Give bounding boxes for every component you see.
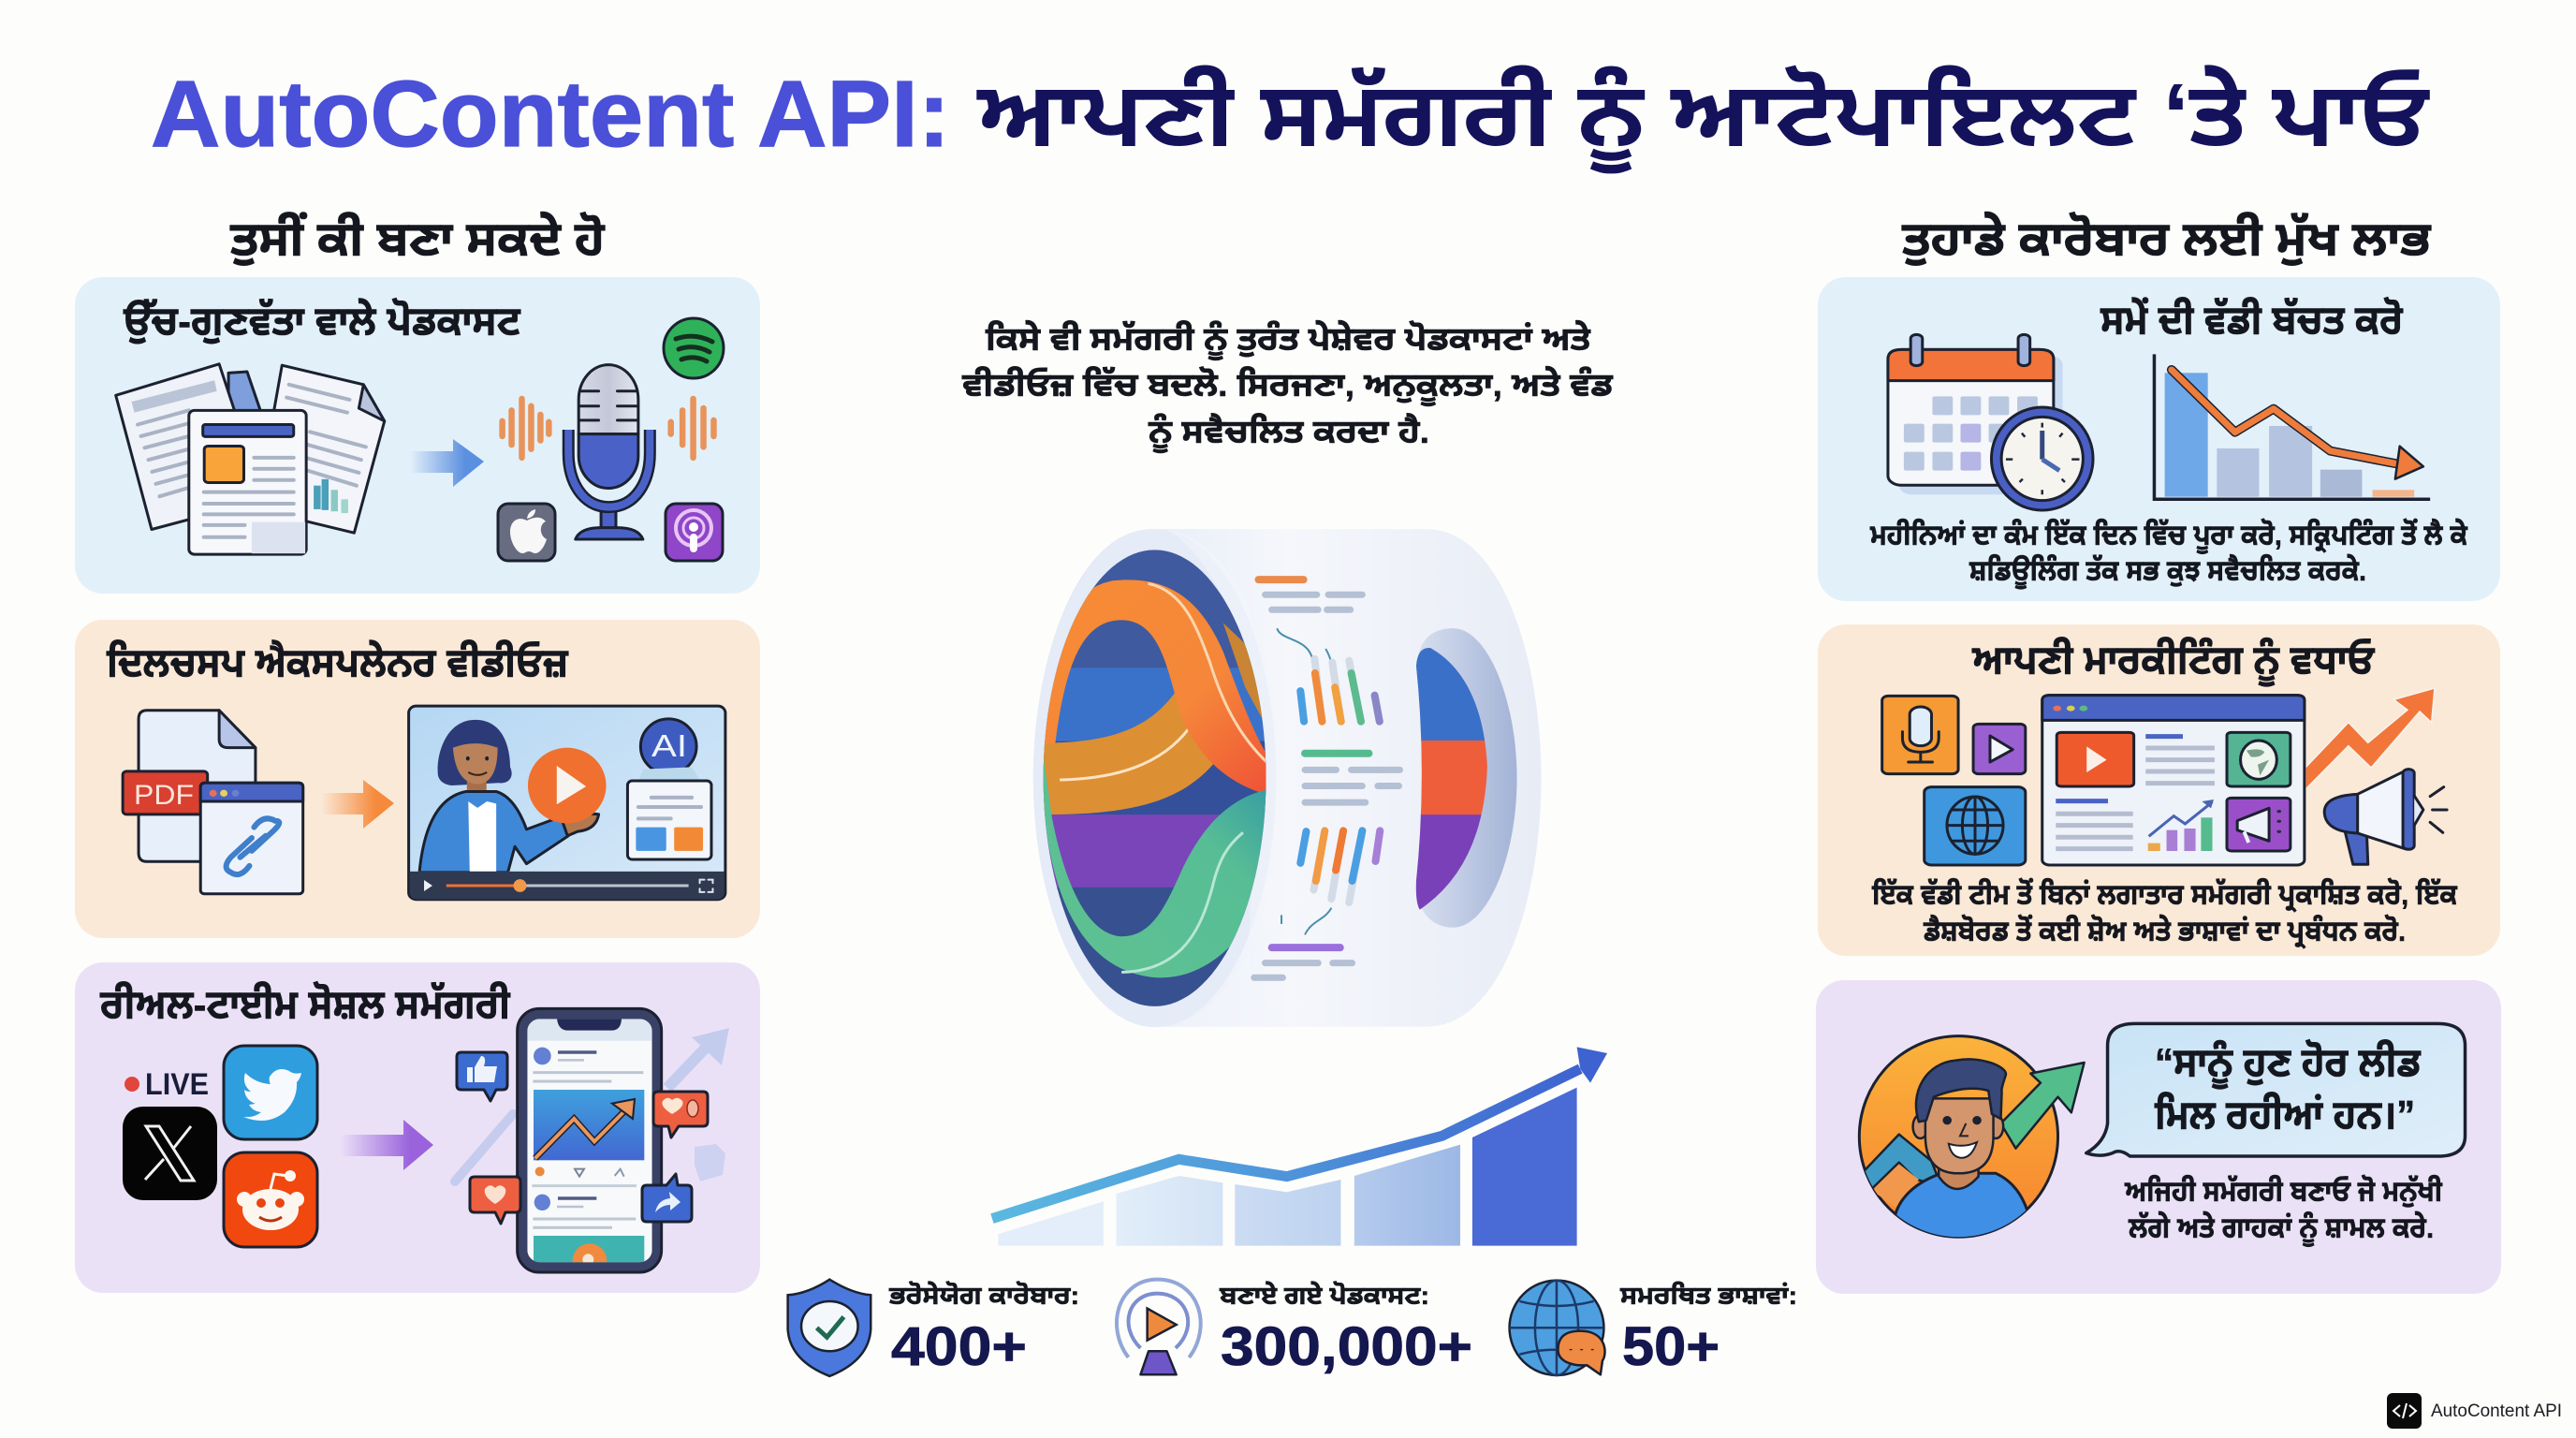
icon: heart bubble left	[470, 1177, 520, 1224]
icon: spotify	[664, 318, 724, 378]
body text: save time	[1869, 519, 2468, 589]
icon: megaphone	[2324, 770, 2447, 864]
body text: testimonial	[2124, 1175, 2443, 1246]
text: AI badge: AI	[651, 728, 687, 763]
panel heading: explainer videos: ਦਿਲਚਸਪ ਐਕਸਪਲੇਨਰ ਵੀਡੀਓਜ਼	[106, 638, 569, 686]
quote text: ਮਿਲ ਰਹੀਆਂ ਹਨ।”	[2154, 1092, 2415, 1138]
intro text: ਵੀਡੀਓਜ਼ ਵਿੱਚ ਬਦਲੋ. ਸਿਰਜਣਾ, ਅਨੁਕੂਲਤਾ, ਅਤੇ ਵੰਡ	[961, 365, 1614, 407]
panel: podcasts	[75, 277, 760, 594]
faded growth arrows	[455, 1028, 729, 1181]
body text: testimonial: ਅਜਿਹੀ ਸਮੱਗਰੀ ਬਣਾਓ ਜੋ ਮਨੁੱਖੀ	[2124, 1175, 2443, 1208]
icon: broadcast	[1117, 1280, 1201, 1374]
icon: calendar and clock	[1888, 334, 2093, 510]
icon: rising arrow	[2305, 688, 2435, 789]
stat: podcasts created	[1117, 1280, 1472, 1377]
icon: podcast tile	[666, 504, 723, 561]
icon: x tile	[123, 1107, 217, 1200]
heading: key benefits: ਤੁਹਾਡੇ ਕਾਰੋਬਾਰ ਲਈ ਮੁੱਖ ਲਾਭ	[1901, 212, 2432, 267]
body text: boost marketing: ਡੈਸ਼ਬੋਰਡ ਤੋਂ ਕਈ ਸ਼ੋਅ ਅਤੇ ਭਾਸ਼ਾਵਾਂ ਦਾ ਪ੍ਰਬੰਧਨ ਕਰੋ.	[1923, 915, 2406, 949]
chart: falling time	[2154, 354, 2430, 499]
arrow: documents to podcast	[410, 439, 484, 487]
title	[151, 62, 2430, 174]
title: AutoContent API:	[151, 62, 950, 167]
stat: supported languages	[1510, 1281, 1797, 1377]
panel: explainer videos	[75, 620, 760, 938]
body text: testimonial: ਲੱਗੇ ਅਤੇ ਗਾਹਕਾਂ ਨੂੰ ਸ਼ਾਮਲ ਕਰੇ.	[2128, 1211, 2434, 1246]
stat: trusted businesses	[788, 1280, 1079, 1377]
watermark: AutoContent API	[2387, 1393, 2562, 1429]
text: PDF label: PDF	[134, 780, 194, 811]
panel: real-time social content	[75, 962, 760, 1293]
icon: microphone	[568, 365, 650, 539]
icon: smiling customer avatar	[1859, 1036, 2085, 1242]
body text: save time: ਮਹੀਨਿਆਂ ਦਾ ਕੰਮ ਇੱਕ ਦਿਨ ਵਿੱਚ ਪੂਰਾ ਕਰੋ, ਸਕ੍ਰਿਪਟਿੰਗ ਤੋਂ ਲੈ ਕੇ	[1869, 519, 2468, 553]
icon: dashboard window	[2042, 696, 2305, 865]
number: 400+: 400+	[891, 1316, 1027, 1377]
body text: boost marketing: ਇੱਕ ਵੱਡੀ ਟੀਮ ਤੋਂ ਬਿਨਾਂ ਲਗਾਤਾਰ ਸਮੱਗਰੀ ਪ੍ਰਕਾਸ਼ਿਤ ਕਰੋ, ਇੱਕ	[1871, 878, 2458, 913]
watermark: AutoContent API: AutoContent API	[2431, 1401, 2562, 1421]
quote text	[2154, 1038, 2422, 1138]
icon: phone feed	[518, 1008, 662, 1278]
intro text: ਕਿਸੇ ਵੀ ਸਮੱਗਰੀ ਨੂੰ ਤੁਰੰਤ ਪੇਸ਼ੇਵਰ ਪੋਡਕਾਸਟਾਂ ਅਤੇ	[985, 319, 1591, 361]
intro text: ਨੂੰ ਸਵੈਚਲਿਤ ਕਰਦਾ ਹੈ.	[1148, 413, 1429, 454]
chart: growth area with arrow	[992, 1047, 1607, 1246]
icon: share bubble	[642, 1174, 692, 1222]
panel: testimonial	[1816, 980, 2501, 1294]
arrow: source to video	[321, 780, 394, 829]
heading: what you can build: ਤੁਸੀਂ ਕੀ ਬਣਾ ਸਕਦੇ ਹੋ	[229, 212, 606, 267]
quote text: “ਸਾਨੂੰ ਹੁਣ ਹੋਰ ਲੀਡ	[2155, 1038, 2422, 1090]
number: 50+: 50+	[1622, 1316, 1720, 1377]
body text: boost marketing	[1871, 878, 2458, 949]
body text: save time: ਸ਼ਡਿਊਲਿੰਗ ਤੱਕ ਸਭ ਕੁਝ ਸਵੈਚਲਿਤ ਕਰਕੇ.	[1969, 554, 2366, 589]
label: podcasts created: ਬਣਾਏ ਗਏ ਪੋਡਕਾਸਟ:	[1219, 1281, 1429, 1310]
live badge: LIVE	[145, 1067, 209, 1101]
arrow: social to phone	[340, 1120, 433, 1170]
icon: apple podcasts tile	[498, 504, 555, 561]
panel: boost marketing	[1818, 624, 2500, 956]
icon: globe with chat	[1510, 1281, 1605, 1375]
icon: like bubble	[457, 1052, 507, 1101]
icon: pdf and link	[123, 711, 303, 894]
label: trusted businesses: ਭਰੋਸੇਯੋਗ ਕਾਰੋਬਾਰ:	[888, 1281, 1079, 1310]
icon: video player	[409, 706, 725, 900]
intro text	[961, 319, 1614, 454]
icon: reddit tile	[224, 1152, 317, 1247]
panel heading: podcasts: ਉੱਚ-ਗੁਣਵੱਤਾ ਵਾਲੇ ਪੋਡਕਾਸਟ	[123, 297, 521, 345]
panel: save time	[1818, 277, 2500, 601]
panel heading: save time: ਸਮੇਂ ਦੀ ਵੱਡੀ ਬੱਚਤ ਕਰੋ	[2100, 296, 2404, 344]
icon: twitter tile	[224, 1046, 317, 1139]
panel heading: social content: ਰੀਅਲ-ਟਾਈਮ ਸੋਸ਼ਲ ਸਮੱਗਰੀ	[99, 980, 511, 1028]
icon: media tiles	[1882, 696, 2026, 865]
title: ਆਪਣੀ ਸਮੱਗਰੀ ਨੂੰ ਆਟੋਪਾਇਲਟ ‘ਤੇ ਪਾਓ	[976, 65, 2430, 174]
speech bubble	[2086, 1023, 2466, 1156]
icon: shield	[788, 1280, 871, 1376]
icon: sound waves	[503, 399, 713, 458]
icon: documents	[116, 364, 385, 554]
panel heading: boost marketing: ਆਪਣੀ ਮਾਰਕੀਟਿੰਗ ਨੂੰ ਵਧਾਓ	[1971, 637, 2376, 687]
label: supported languages: ਸਮਰਥਿਤ ਭਾਸ਼ਾਵਾਂ:	[1619, 1282, 1797, 1310]
icon: heart bubble right	[653, 1092, 708, 1137]
number: 300,000+: 300,000+	[1221, 1316, 1472, 1377]
illustration: content transformation roll	[1033, 529, 1542, 1027]
